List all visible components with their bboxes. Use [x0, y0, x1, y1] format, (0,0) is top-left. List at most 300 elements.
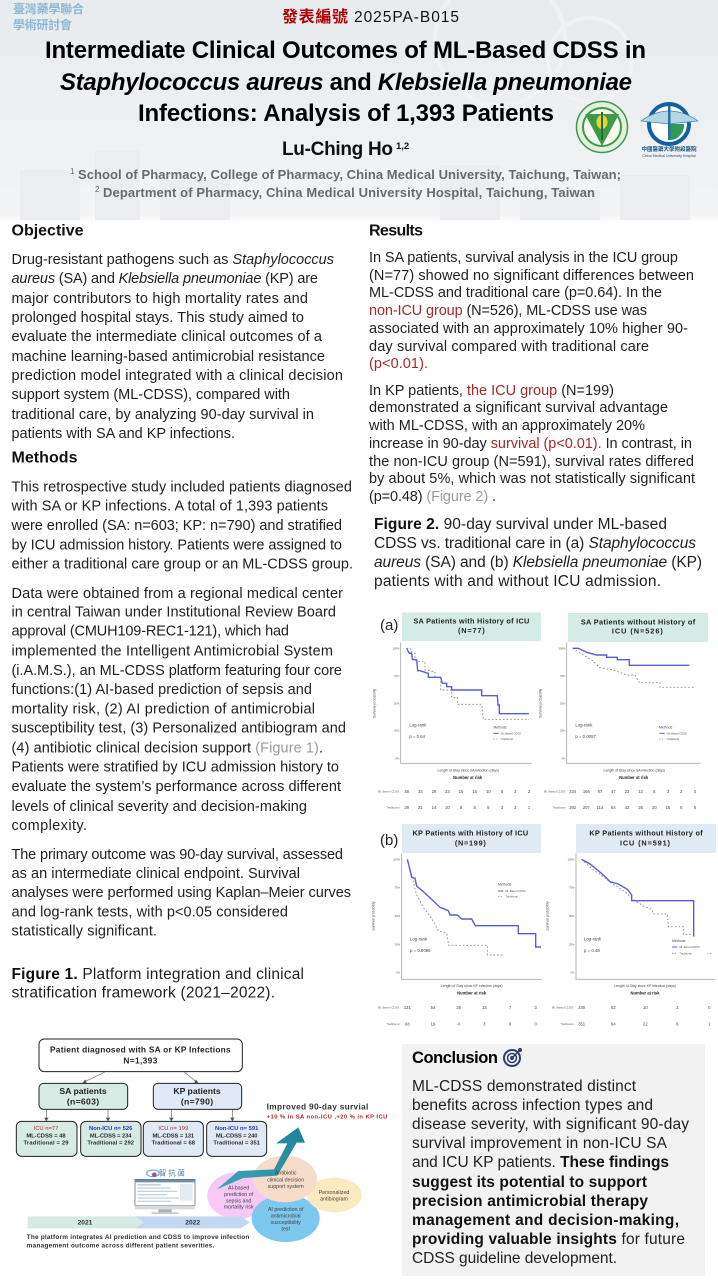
chart: KP with ICU history: Traditional	[386, 1022, 400, 1026]
figure 1: flowchart and platform framework	[16, 1039, 387, 1250]
text: objective body: support system (ML-CDSS), compared with	[12, 387, 290, 403]
chart: SA with ICU history: Log-rank	[409, 723, 427, 728]
labels: platform functions: antibiogram	[320, 1196, 348, 1202]
box: SA patients: SA patients	[59, 1086, 107, 1096]
icon: platform monitor: 智 抗 菌	[159, 1169, 185, 1178]
chart: SA without ICU history: 207	[583, 805, 590, 810]
chart: SA with ICU history: 34	[418, 789, 423, 794]
chart: KP without ICU history: Traditional	[679, 951, 692, 955]
chart: SA without ICU history: 100%	[559, 646, 566, 650]
chart: KP without ICU history: 351	[578, 1021, 586, 1026]
chart: KP without ICU history: ML-Based CDSS	[679, 945, 700, 949]
conference logo text: 學術研討會	[13, 17, 72, 32]
figure note: management outcome across different patient severities.	[27, 1243, 215, 1250]
text: objective body: aureus (SA) and Klebsiella pneumoniae (KP) are	[12, 271, 318, 287]
chart: SA with ICU history: 3	[501, 805, 504, 810]
text: methods paragraph 2: complexity.	[12, 818, 87, 834]
chart: KP with ICU history: 7	[509, 1005, 512, 1010]
box: SA non-ICU: ML-CDSS = 234	[90, 1133, 132, 1139]
callout: improved survival: +10 % in SA non-ICU ,+20 % in KP ICU	[267, 1114, 387, 1120]
chart: SA with ICU history: 1	[528, 805, 531, 810]
curve: traditional	[573, 648, 695, 687]
chart: SA with ICU history: 0%	[395, 756, 400, 760]
heading: conclusion: Conclusion	[412, 1049, 498, 1067]
chart: SA without ICU history: Traditional	[667, 737, 679, 741]
poster number	[282, 8, 459, 26]
text: conclusion body: disease severity, with significant 90-day	[412, 1116, 689, 1133]
chart: KP without ICU history: Survival probability	[546, 901, 550, 931]
title: Intermediate Clinical Outcomes of ML-Based CDSS in	[45, 37, 646, 64]
chart: SA with ICU history: 8	[474, 805, 477, 810]
text: methods paragraph 2: evaluate the system’s performance across different	[12, 779, 341, 795]
chart: KP without ICU history: 6	[676, 1021, 679, 1026]
text: methods paragraph 2: in central Taiwan under Institutional Review Board	[12, 605, 336, 621]
text: results KP paragraph: the non-ICU group (N=591), survival rates differed	[369, 454, 694, 470]
heading: figure 1 caption	[12, 966, 304, 1002]
chart: KP with ICU history: 0%	[396, 971, 401, 975]
box: KP non-ICU: Traditional = 351	[213, 1141, 261, 1147]
chart: KP without ICU history: 75%	[569, 886, 575, 890]
curve: traditional	[407, 648, 529, 719]
conference logo text	[13, 1, 84, 32]
text: objective body: prolonged hospital stays. This study aimed to	[12, 310, 304, 326]
curve: ML-CDSS	[573, 648, 689, 665]
logo: China Medical University Hospital	[641, 104, 698, 158]
chart: KP without ICU history	[546, 824, 716, 1026]
heading: figure 1 caption: stratification framework (2021–2022).	[12, 985, 275, 1002]
text: results SA paragraph: (p<0.01).	[369, 356, 428, 372]
chart: SA without ICU history: 22	[625, 789, 630, 794]
text: results KP paragraph: In KP patients, the ICU group (N=199)	[369, 383, 614, 399]
chart: SA without ICU history: 50%	[560, 701, 566, 705]
box: KP patients: (n=790)	[181, 1097, 213, 1107]
chart: SA without ICU history: Survival probability	[539, 688, 543, 718]
timeline 2021-2022: 2022	[185, 1219, 200, 1226]
chart: SA without ICU history: 3	[667, 789, 670, 794]
text: results KP paragraph: with ML-CDSS, with an approximately 20%	[368, 418, 645, 434]
text: methods paragraph 2: approval (CMUH109-REC1-121), which had	[12, 624, 289, 640]
box: KP ICU: ICU n= 199	[158, 1126, 188, 1132]
chart: KP with ICU history: Log-rank	[410, 937, 428, 942]
figure note	[27, 1234, 249, 1250]
chart: KP with ICU history	[372, 824, 542, 1026]
labels: platform functions: antimicrobial	[271, 1213, 301, 1219]
chart: SA with ICU history: Number at risk	[453, 775, 483, 780]
text: objective body: patients with SA and KP infections.	[12, 426, 235, 442]
chart: SA with ICU history: ML-Based CDSS	[501, 731, 521, 735]
chart: KP with ICU history: Number at risk	[457, 990, 487, 995]
text: methods paragraph 3	[12, 847, 351, 940]
chart: KP with ICU history: Length of Stay since KP infection (days)	[441, 984, 503, 988]
text: results KP paragraph: demonstrated a significant survival advantage	[369, 400, 668, 416]
box: SA ICU: Traditional = 29	[23, 1141, 69, 1147]
chart: SA without ICU history: 292	[569, 805, 577, 810]
box: SA non-ICU	[81, 1121, 141, 1156]
arrows: top split	[45, 1072, 234, 1121]
chart: KP without ICU history: 52	[611, 1005, 616, 1010]
box: KP non-ICU: ML-CDSS = 240	[216, 1133, 257, 1139]
chart: KP with ICU history: Survival probability	[372, 901, 376, 931]
text: conclusion body: survival improvement in non-ICU SA	[412, 1135, 668, 1152]
chart: KP without ICU history: 100%	[568, 857, 575, 861]
box: KP ICU: ML-CDSS = 131	[152, 1133, 195, 1139]
chart: KP with ICU history: 19	[431, 1021, 436, 1026]
panel: results	[368, 223, 695, 505]
chart title	[402, 612, 541, 641]
labels: platform functions: mortality risk	[224, 1205, 254, 1211]
box: SA patients: (n=603)	[67, 1097, 99, 1107]
text: results KP paragraph: (p=0.48) (Figure 2) .	[369, 489, 496, 505]
text: methods paragraph 3: The primary outcome was 90-day survival, assessed	[12, 847, 343, 863]
text: methods paragraph 3: and log-rank tests, with p<0.05 considered	[12, 905, 288, 921]
author: Lu-Ching Ho	[282, 139, 393, 160]
box: KP non-ICU	[207, 1121, 267, 1156]
chart: SA without ICU history: 2	[680, 789, 683, 794]
chart: KP with ICU history: 54	[431, 1005, 436, 1010]
affiliations: Department of Pharmacy, China Medical University Hospital, Taichung, Taiwan	[103, 185, 595, 200]
chart: SA with ICU history: 15	[472, 789, 478, 794]
affiliations: 2	[95, 185, 100, 194]
logo: China Medical University Hospital: 中國醫藥大學附設醫院	[641, 145, 697, 153]
chart: SA with ICU history: 2	[528, 789, 531, 794]
text: objective body: prediction model integrated with a clinical decision	[12, 368, 343, 384]
labels: platform functions: susceptibility	[271, 1220, 301, 1226]
text: methods paragraph 1: with SA or KP infections. A total of 1,393 patients	[10, 499, 328, 515]
chart: KP without ICU history: 94	[611, 1021, 616, 1026]
box: SA patients	[39, 1083, 128, 1109]
chart: KP with ICU history: ML-Based CDSS	[378, 1006, 399, 1010]
chart: SA without ICU history: 97	[598, 789, 603, 794]
text: objective body: evaluate the intermediate clinical outcomes of a	[12, 329, 323, 345]
chart: KP with ICU history: 131	[404, 1005, 411, 1010]
chart: SA without ICU history: 6	[694, 805, 697, 810]
chart: SA without ICU history: 20	[652, 805, 657, 810]
chart title	[576, 824, 716, 853]
chart: SA with ICU history: 10	[445, 805, 450, 810]
chart: KP with ICU history: 50%	[395, 914, 401, 918]
text: methods paragraph 2: implemented the Intelligent Antimicrobial System	[12, 644, 333, 660]
heading: objective: Objective	[12, 223, 84, 240]
chart: SA without ICU history: Traditional	[552, 806, 566, 810]
text: conclusion body: suggest its potential to support	[412, 1174, 647, 1191]
heading: figure 2 caption	[374, 516, 702, 590]
heading: results: Results	[369, 223, 423, 240]
chart: KP without ICU history: 240	[578, 1005, 586, 1010]
labels: platform functions: AI-based	[228, 1186, 249, 1192]
text: methods paragraph 2: (i.A.M.S.), an ML-CDSS platform featuring four core	[12, 663, 342, 679]
labels: platform functions: support system	[268, 1184, 304, 1190]
curve: ML-CDSS	[407, 648, 529, 714]
chart: SA with ICU history: p = 0.64	[409, 734, 426, 739]
timeline 2021-2022	[28, 1216, 250, 1228]
poster number: 發表編號	[282, 8, 348, 26]
chart: KP without ICU history: 0%	[570, 971, 575, 975]
text: results KP paragraph	[368, 383, 695, 505]
labels: platform functions: test	[281, 1226, 290, 1232]
chart: KP with ICU history: Traditional	[505, 895, 518, 899]
chart: SA with ICU history: 29	[432, 789, 437, 794]
curve: ML-CDSS	[407, 859, 541, 947]
chart title: (N=77)	[458, 626, 485, 635]
chart: KP with ICU history: 3	[483, 1021, 486, 1026]
author: 1,2	[396, 141, 409, 152]
box: KP patients	[153, 1083, 242, 1109]
chart: KP without ICU history: ML-Based CDSS	[552, 1006, 573, 1010]
chart title: KP Patients with History of ICU	[412, 829, 528, 838]
chart: SA with ICU history: 14	[432, 805, 437, 810]
labels: platform functions: Personalized	[319, 1190, 349, 1196]
title: Infections: Analysis of 1,393 Patients	[138, 100, 554, 127]
heading: methods: Methods	[12, 450, 78, 467]
text: methods paragraph 3: statistically significant.	[12, 924, 157, 940]
box: KP ICU	[143, 1121, 203, 1156]
chart: KP without ICU history: 1	[708, 1021, 711, 1026]
text: methods paragraph 2: mortality risk, (2) AI prediction of antimicrobial	[12, 701, 315, 717]
chart: KP with ICU history: 13	[482, 1005, 487, 1010]
curve: traditional	[582, 859, 694, 934]
text: results KP paragraph: increase in 90-day survival (p<0.01). In contrast, in	[369, 436, 692, 452]
chart: KP with ICU history: ML-Based CDSS	[505, 889, 526, 893]
chart: KP with ICU history: 4	[458, 1021, 461, 1026]
chart: KP without ICU history: Log-rank	[584, 937, 602, 942]
chart title	[568, 613, 708, 642]
chart: SA with ICU history: 5	[487, 805, 490, 810]
chart: SA without ICU history: 12	[638, 789, 644, 794]
chart: SA without ICU history: 26	[638, 805, 644, 810]
chart: SA with ICU history: 50%	[394, 701, 400, 705]
text: conclusion body: providing valuable insights for future	[412, 1231, 685, 1248]
chart: SA without ICU history: p = 0.0057	[575, 734, 597, 739]
chart title: ICU (N=526)	[612, 627, 663, 636]
chart: KP with ICU history: 100%	[393, 857, 401, 861]
heading: figure 2 caption: patients with and without ICU admission.	[374, 573, 661, 590]
chart: SA without ICU history: Log-rank	[575, 723, 593, 728]
labels: platform functions: clinical decision	[267, 1178, 304, 1184]
chart: SA without ICU history: 234	[569, 789, 577, 794]
text: results KP paragraph: by about 5%, which was not statistically significant	[369, 471, 695, 487]
text: conclusion body: benefits across infection types and	[412, 1097, 653, 1114]
chart: KP without ICU history: 22	[643, 1021, 648, 1026]
chart: SA without ICU history: 0%	[561, 756, 566, 760]
affiliations: 1	[70, 167, 75, 176]
timeline 2021-2022: 2021	[78, 1219, 93, 1226]
text: methods paragraph 2: levels of clinical severity and decision-making	[12, 799, 307, 815]
box: all patients: Patient diagnosed with SA or KP Infections	[50, 1045, 231, 1055]
text: methods paragraph 2: (4) antibiotic clinical decision support (Figure 1).	[12, 741, 323, 757]
text: objective body: major contributors to high mortality rates and	[12, 291, 308, 307]
box: SA ICU	[16, 1121, 77, 1156]
chart: SA without ICU history: 114	[597, 805, 604, 810]
text: methods paragraph 2: susceptibility test, (3) Personalized antibiogram and	[12, 721, 346, 737]
chart title	[402, 824, 541, 853]
chart: KP without ICU history: Length of Stay since KP infection (days)	[614, 984, 676, 988]
box: all patients: N=1,393	[123, 1055, 158, 1065]
figure note: The platform integrates AI prediction and CDSS to improve infection	[27, 1234, 249, 1241]
label: panel a: (a)	[380, 617, 398, 634]
chart: SA without ICU history: 64	[611, 805, 616, 810]
chart: SA with ICU history: 29	[404, 805, 410, 810]
conference logo text: 臺灣藥學聯合	[13, 1, 84, 16]
diagram: platform functions	[207, 1156, 362, 1242]
text: objective body: machine learning-based antimicrobial resistance	[12, 349, 325, 365]
chart: SA with ICU history: 15	[459, 789, 464, 794]
header background	[0, 0, 718, 222]
poster number: 2025PA-B015	[354, 9, 459, 26]
chart: SA without ICU history	[539, 613, 708, 810]
panel: objective	[12, 223, 343, 442]
text: methods paragraph 2: Data were obtained from a regional medical center	[12, 586, 343, 602]
heading: figure 2 caption: aureus (SA) and (b) Klebsiella pneumoniae (KP)	[374, 554, 702, 571]
text: results SA paragraph: (N=77) showed no significant differences between	[369, 268, 694, 284]
chart: KP with ICU history: 75%	[395, 886, 401, 890]
labels: platform functions: sepsis and	[226, 1198, 251, 1204]
icon: platform monitor	[135, 1169, 195, 1214]
chart title: SA Patients without History of	[581, 617, 696, 626]
chart: SA without ICU history: 6	[680, 805, 683, 810]
chart: SA without ICU history: Number at risk	[619, 775, 649, 780]
chart title: SA Patients with History of ICU	[413, 617, 529, 626]
box: KP non-ICU: Non-ICU n= 591	[215, 1126, 259, 1132]
text: results SA paragraph: ML-CDSS and traditional care (p=0.64). In the	[369, 285, 662, 301]
chart: KP without ICU history: 25%	[569, 942, 575, 946]
text: methods paragraph 1: either a traditional care group or an ML-CDSS group.	[12, 557, 353, 573]
box: SA ICU: ML-CDSS = 48	[26, 1133, 66, 1139]
heading: figure 1 caption: Figure 1. Platform integration and clinical	[12, 966, 304, 983]
text: conclusion body: and ICU KP patients. These findings	[412, 1154, 669, 1171]
chart: KP with ICU history: 68	[405, 1021, 410, 1026]
chart: SA without ICU history: 166	[583, 789, 590, 794]
chart: SA without ICU history: ML-Based CDSS	[667, 731, 687, 735]
chart: SA with ICU history: Methods	[493, 725, 507, 729]
chart: KP with ICU history: 26	[456, 1005, 462, 1010]
heading: figure 2 caption: CDSS vs. traditional care in (a) Staphylococcus	[374, 535, 696, 552]
curve: ML-CDSS	[582, 859, 694, 937]
chart: KP without ICU history: 0	[708, 1005, 711, 1010]
chart title: KP Patients without History of	[589, 829, 703, 838]
chart: SA with ICU history: 2	[514, 805, 517, 810]
chart: KP with ICU history: 0	[509, 1021, 512, 1026]
box: SA non-ICU: Non-ICU n= 526	[89, 1126, 133, 1132]
text: results SA paragraph: associated with an approximately 10% higher 90-	[369, 321, 688, 337]
icon: target	[504, 1048, 522, 1066]
chart: SA without ICU history: 25%	[560, 729, 566, 733]
chart: KP without ICU history: Traditional	[560, 1022, 574, 1026]
text: objective body	[12, 252, 343, 442]
labels: platform functions: AI prediction of	[268, 1207, 304, 1213]
text: objective body: traditional care, by analyzing 90-day survival in	[12, 407, 314, 423]
chart: SA without ICU history: Methods	[659, 725, 673, 729]
text: results SA paragraph: non-ICU group (N=526), ML-CDSS use was	[369, 303, 647, 319]
labels: platform functions: prediction of	[224, 1192, 254, 1198]
chart: SA without ICU history: 6	[653, 789, 656, 794]
panel: methods	[10, 450, 353, 940]
box: KP ICU: Traditional = 68	[152, 1141, 196, 1147]
text: methods paragraph 2: Patients were stratified by ICU admission history to	[12, 760, 339, 776]
panel: conclusion	[402, 1044, 705, 1276]
chart: KP without ICU history: 3	[676, 1005, 679, 1010]
curve: traditional	[407, 859, 503, 955]
text: conclusion body: precision antimicrobial therapy	[412, 1193, 648, 1210]
logo: China Medical University	[576, 102, 628, 152]
chart: SA with ICU history	[373, 612, 541, 810]
chart: SA without ICU history: 15	[666, 805, 671, 810]
box: SA ICU: ICU n=77	[34, 1126, 58, 1132]
chart: KP with ICU history: 3	[535, 1005, 538, 1010]
chart: SA without ICU history: 47	[611, 789, 616, 794]
chart: SA with ICU history: Survival probability	[373, 688, 377, 718]
affiliations: School of Pharmacy, College of Pharmacy, China Medical University, Taichung, Taiwan;	[78, 167, 621, 182]
chart: SA with ICU history: 21	[418, 805, 423, 810]
text: results SA paragraph	[369, 250, 694, 372]
chart title: ICU (N=591)	[620, 838, 671, 847]
chart: KP with ICU history: 0	[535, 1021, 538, 1026]
chart title: (N=199)	[455, 838, 486, 847]
labels: platform functions: Antibiotic	[275, 1171, 297, 1177]
text: methods paragraph 1: were enrolled (SA: n=603; KP: n=790) and stratified	[10, 518, 342, 534]
chart: SA with ICU history: 23	[445, 789, 450, 794]
labels: platform functions	[224, 1171, 349, 1232]
arrow: rising improvement	[217, 1127, 305, 1189]
chart: KP with ICU history: 25%	[395, 942, 401, 946]
chart: KP with ICU history: Methods	[498, 883, 512, 887]
chart: SA with ICU history: Traditional	[501, 737, 513, 741]
text: methods paragraph 1: This retrospective study included patients diagnosed	[12, 480, 352, 496]
heading: figure 2 caption: Figure 2. 90-day survival under ML-based	[374, 516, 667, 533]
chart: SA with ICU history: ML-Based CDSS	[378, 790, 399, 794]
chart: SA with ICU history: 48	[404, 789, 410, 794]
label: panel b: (b)	[380, 832, 398, 849]
text: methods paragraph 2	[12, 586, 346, 834]
text: results SA paragraph: In SA patients, survival analysis in the ICU group	[369, 250, 678, 266]
chart: SA with ICU history: 10	[486, 789, 491, 794]
text: methods paragraph 3: analyses were performed using Kaplan–Meier curves	[12, 885, 351, 901]
chart: KP without ICU history: Number at risk	[630, 990, 660, 995]
chart: SA with ICU history: 2	[514, 789, 517, 794]
chart: SA without ICU history: 42	[625, 805, 630, 810]
text: methods paragraph 2: functions:(1) AI-based prediction of sepsis and	[12, 682, 312, 698]
logo: China Medical University Hospital: China Medical University Hospital	[642, 154, 696, 158]
chart: KP without ICU history: 50%	[569, 914, 575, 918]
title: Staphylococcus aureus and Klebsiella pneumoniae	[60, 69, 632, 96]
chart: SA with ICU history: 8	[460, 805, 463, 810]
chart: KP with ICU history: p = 0.0085	[410, 948, 431, 953]
callout: improved survival	[267, 1102, 387, 1120]
chart: KP without ICU history: p = 0.48	[584, 948, 600, 953]
text: conclusion body	[412, 1078, 689, 1267]
callout: improved survival: Improved 90-day survial	[267, 1102, 368, 1112]
chart: SA with ICU history: Length of Stay since SA infection (days)	[438, 769, 499, 773]
text: conclusion body: management and decision-making,	[412, 1212, 679, 1229]
text: objective body: Drug-resistant pathogens such as Staphylococcus	[12, 252, 334, 268]
chart: SA without ICU history: ML-Based CDSS	[544, 790, 565, 794]
affiliations	[70, 167, 621, 200]
chart: KP without ICU history: 10	[643, 1005, 648, 1010]
text: conclusion body: ML-CDSS demonstrated distinct	[412, 1078, 637, 1095]
text: conclusion body: CDSS guideline development.	[412, 1250, 617, 1267]
chart: SA without ICU history: 0	[694, 789, 697, 794]
box: KP patients: KP patients	[173, 1086, 221, 1096]
text: results SA paragraph: day survival compared with traditional care	[369, 339, 649, 355]
chart: SA without ICU history: 75%	[560, 674, 566, 678]
box: all patients	[39, 1039, 242, 1072]
text: methods paragraph 3: as an intermediate clinical endpoint. Survival	[12, 866, 300, 882]
chart: SA with ICU history: 5	[501, 789, 504, 794]
text: methods paragraph 1	[10, 480, 353, 573]
chart: KP without ICU history: Methods	[672, 939, 686, 943]
chart: SA without ICU history: Length of Stay since SA infection (days)	[604, 769, 665, 773]
chart: SA with ICU history: 75%	[394, 674, 400, 678]
chart: SA with ICU history: 100%	[393, 646, 400, 650]
